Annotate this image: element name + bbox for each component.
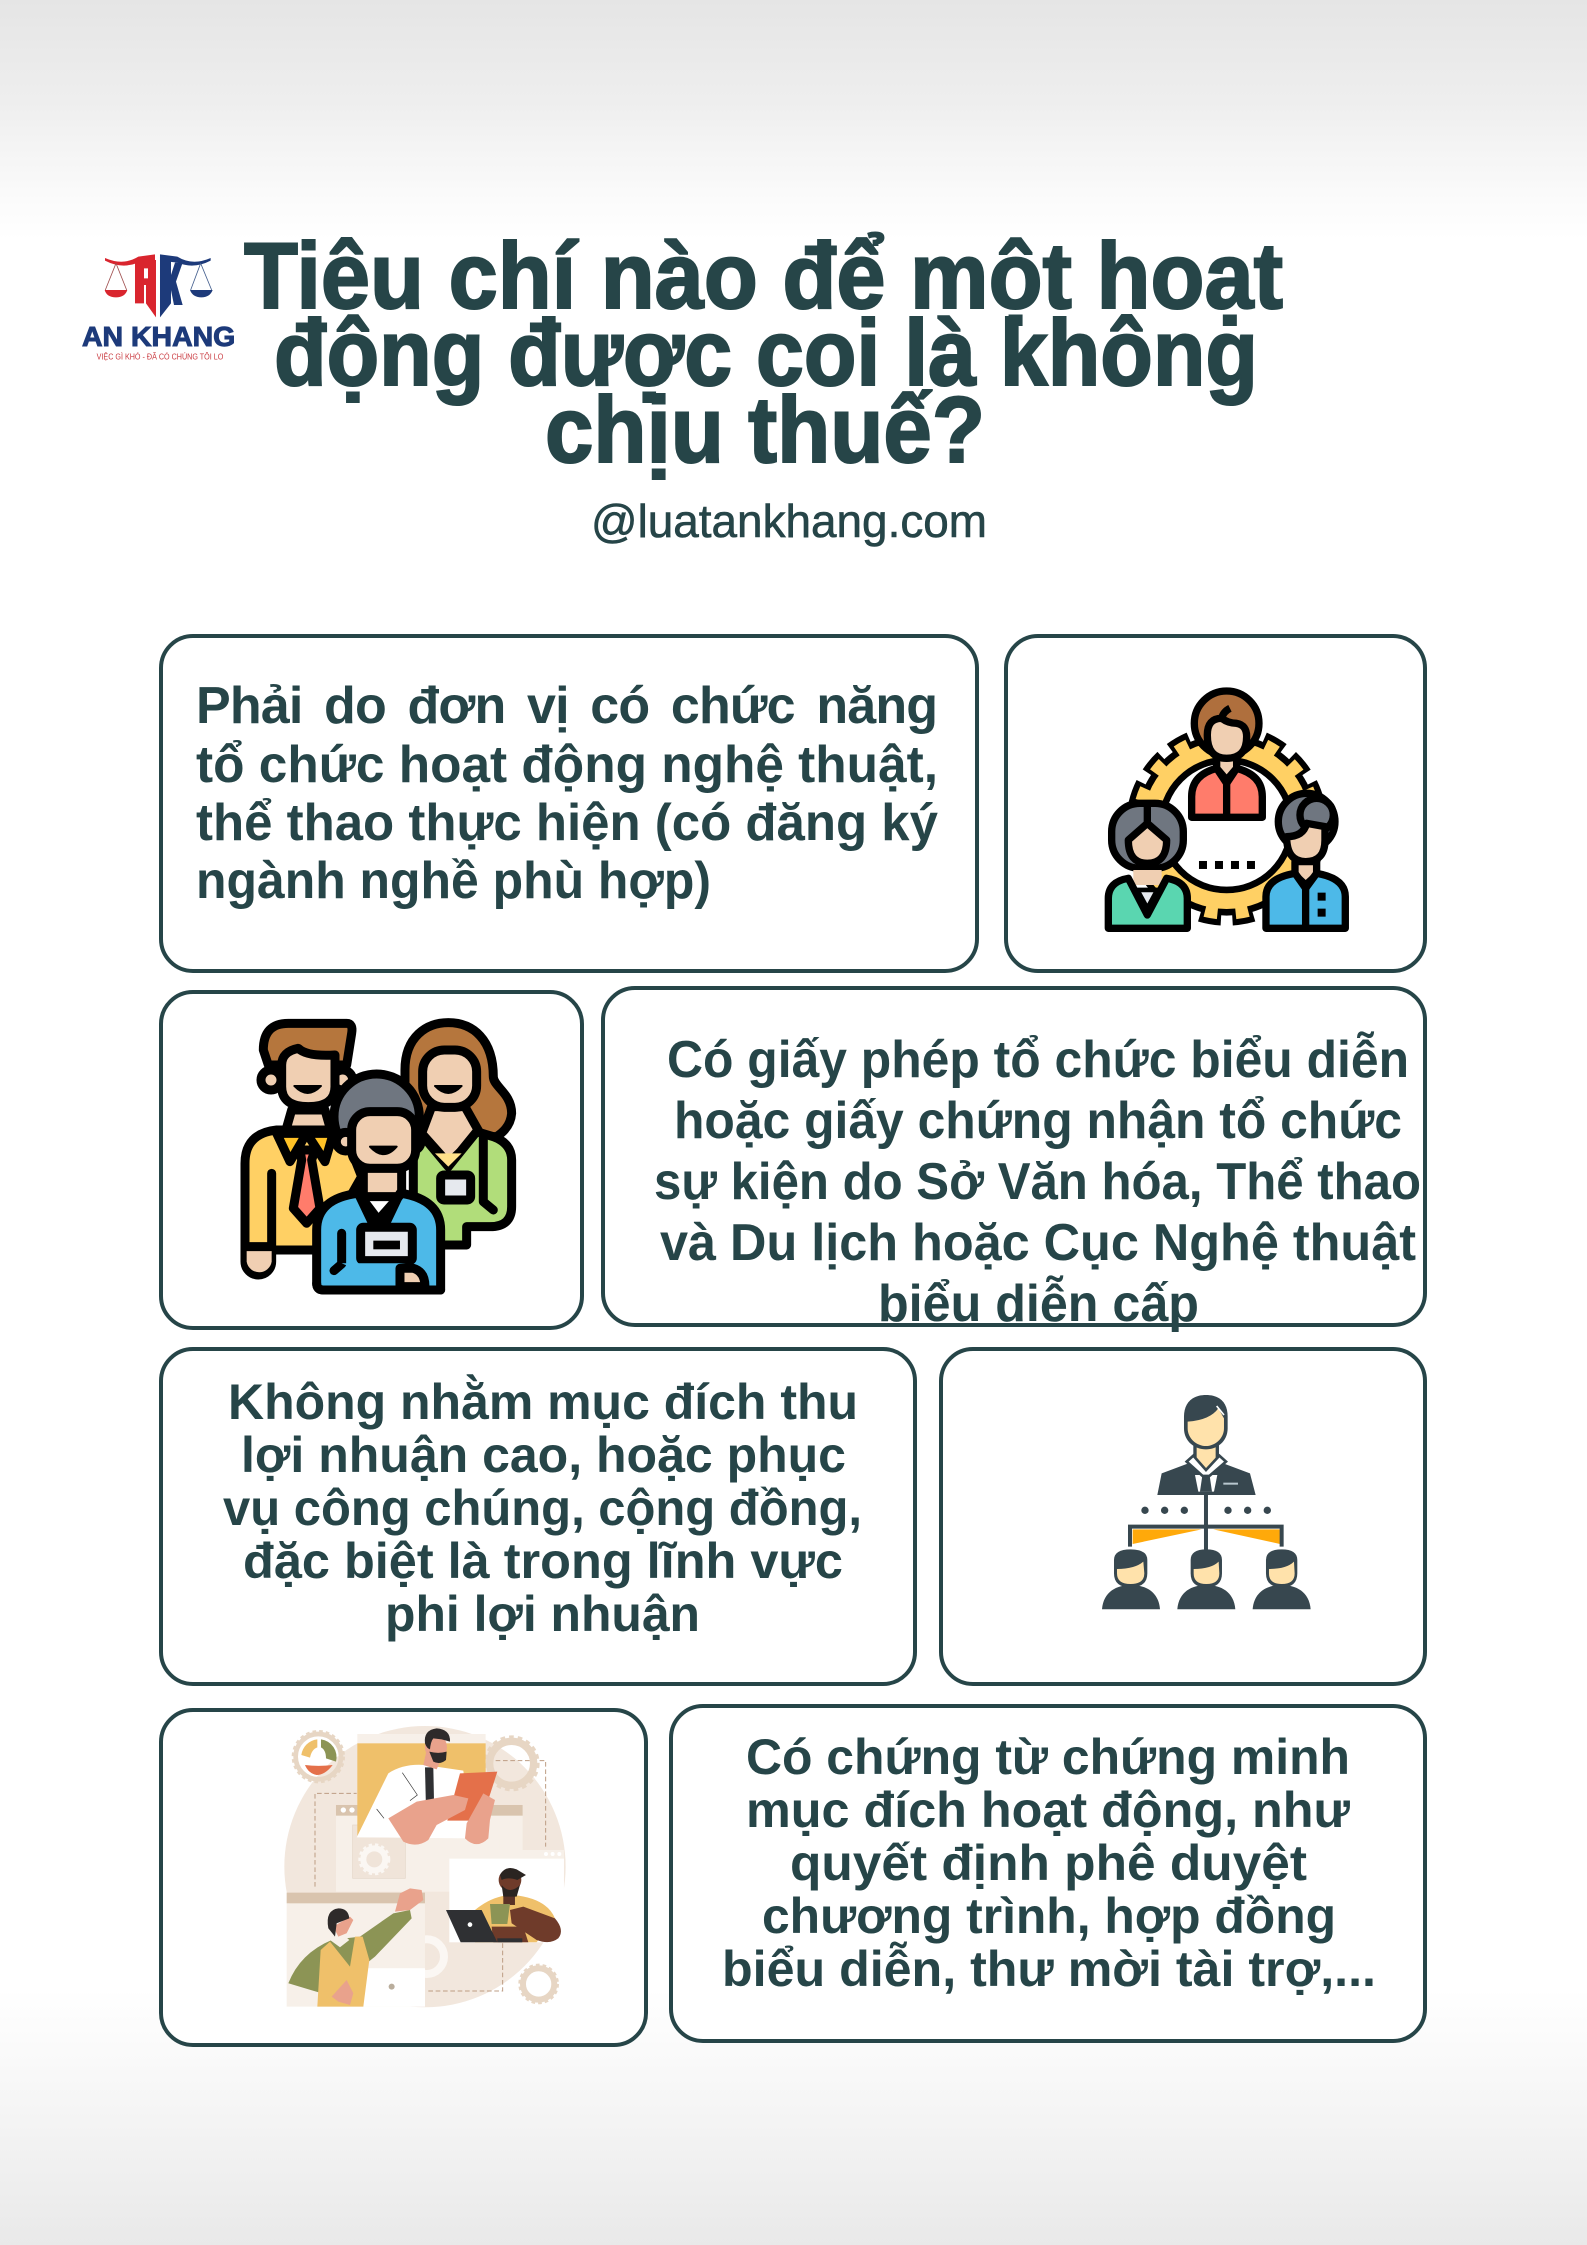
website handle: @luatankhang.com	[591, 495, 987, 547]
icon: online team meeting illustration	[284, 1726, 566, 2007]
panel: icon card 3	[941, 1349, 1425, 1684]
panel: criterion 4 text: chương trình, hợp đồng	[762, 1888, 1336, 1944]
panel: criterion 2 text: hoặc giấy chứng nhận tổ chức	[674, 1092, 1402, 1150]
panel: criterion 4 text: quyết định phê duyệt	[790, 1835, 1307, 1891]
icon: organisation hierarchy	[1102, 1395, 1311, 1609]
panel: icon card 1	[1006, 636, 1425, 971]
title: Tiêu chí nào để một hoạt	[244, 223, 1283, 328]
title: chịu thuế?	[545, 377, 985, 482]
logo tagline: VIỆC GÌ KHÓ - ĐÃ CÓ CHÚNG TÔI LO	[97, 352, 223, 361]
icon: three colleagues	[245, 1023, 512, 1290]
panel: criterion 2 text: biểu diễn cấp	[878, 1275, 1199, 1333]
panel: criterion 3 text: lợi nhuận cao, hoặc phục	[241, 1427, 846, 1483]
logo wordmark: AN KHANG	[82, 321, 235, 352]
panel: criterion 1 text: tổ chức hoạt động nghệ thuật,	[196, 736, 938, 794]
title: động được coi là không	[274, 300, 1258, 405]
panel: criterion 3 text: đặc biệt là trong lĩnh vực	[243, 1533, 843, 1589]
panel: criterion 1 text	[161, 636, 977, 971]
title	[244, 223, 1283, 482]
panel: icon card 2	[161, 992, 582, 1328]
panel: criterion 1 text: ngành nghề phù hợp)	[196, 852, 711, 910]
panel: criterion 1 text: thể thao thực hiện (có đăng ký	[196, 794, 938, 852]
panel: criterion 3 text	[161, 1349, 915, 1684]
panel: criterion 2 text: Có giấy phép tổ chức biểu diễn	[667, 1031, 1409, 1089]
panel: criterion 4 text	[671, 1706, 1425, 2041]
panel: criterion 1 text: Phải do đơn vị có chức năng	[196, 677, 938, 735]
panel: criterion 3 text: phi lợi nhuận	[385, 1586, 700, 1642]
panel: criterion 2 text: và Du lịch hoặc Cục Nghệ thuật	[660, 1214, 1416, 1272]
panel: criterion 4 text: biểu diễn, thư mời tài trợ,...	[722, 1941, 1376, 1997]
icon: scales of justice	[105, 254, 213, 317]
panel: criterion 2 text	[603, 988, 1425, 1333]
panel: criterion 3 text: Không nhằm mục đích thu	[228, 1374, 858, 1430]
logo: An Khang	[82, 254, 235, 361]
panel: criterion 4 text: mục đích hoạt động, như	[746, 1782, 1351, 1838]
icon: team around gear	[1108, 691, 1345, 928]
panel: icon card 4	[161, 1710, 646, 2045]
panel: criterion 3 text: vụ công chúng, cộng đồng,	[223, 1480, 862, 1536]
panel: criterion 4 text: Có chứng từ chứng minh	[746, 1729, 1350, 1785]
panel: criterion 2 text: sự kiện do Sở Văn hóa, Thể thao	[654, 1153, 1421, 1211]
